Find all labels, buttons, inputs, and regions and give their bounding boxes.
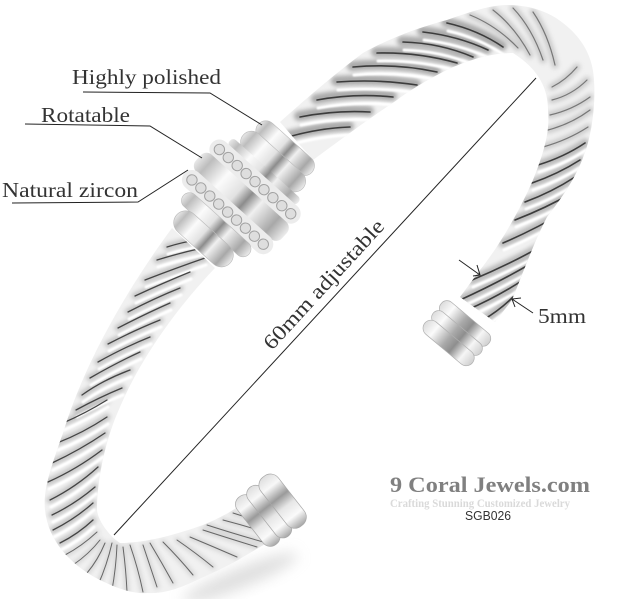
- upper cable arc: [280, 5, 594, 320]
- label: 60mm adjustable: 60mm adjustable: [258, 214, 389, 354]
- arrow: width marker lower: [512, 298, 533, 313]
- lower end cap: [231, 470, 310, 551]
- dimension line: 60mm diameter: [114, 78, 536, 535]
- shadow under lower cap: [179, 546, 301, 599]
- brand tagline: Crafting Stunning Customized Jewelry: [390, 498, 570, 510]
- label: Highly polished: Highly polished: [72, 65, 222, 89]
- arrow: width marker upper: [459, 260, 480, 276]
- central rotatable hub with zircon rows: [152, 102, 335, 287]
- product code: SGB026: [465, 509, 511, 523]
- label: Rotatable: Rotatable: [41, 103, 130, 127]
- leader line: natural zircon: [12, 170, 188, 203]
- upper end cap: [420, 298, 494, 369]
- brand name: 9 Coral Jewels.com: [390, 472, 590, 497]
- label: Natural zircon: Natural zircon: [2, 178, 139, 202]
- label: 5mm: 5mm: [538, 304, 586, 328]
- leader line: highly polished: [83, 92, 262, 125]
- leader line: rotatable: [25, 124, 202, 158]
- lower cable arc: [44, 228, 264, 593]
